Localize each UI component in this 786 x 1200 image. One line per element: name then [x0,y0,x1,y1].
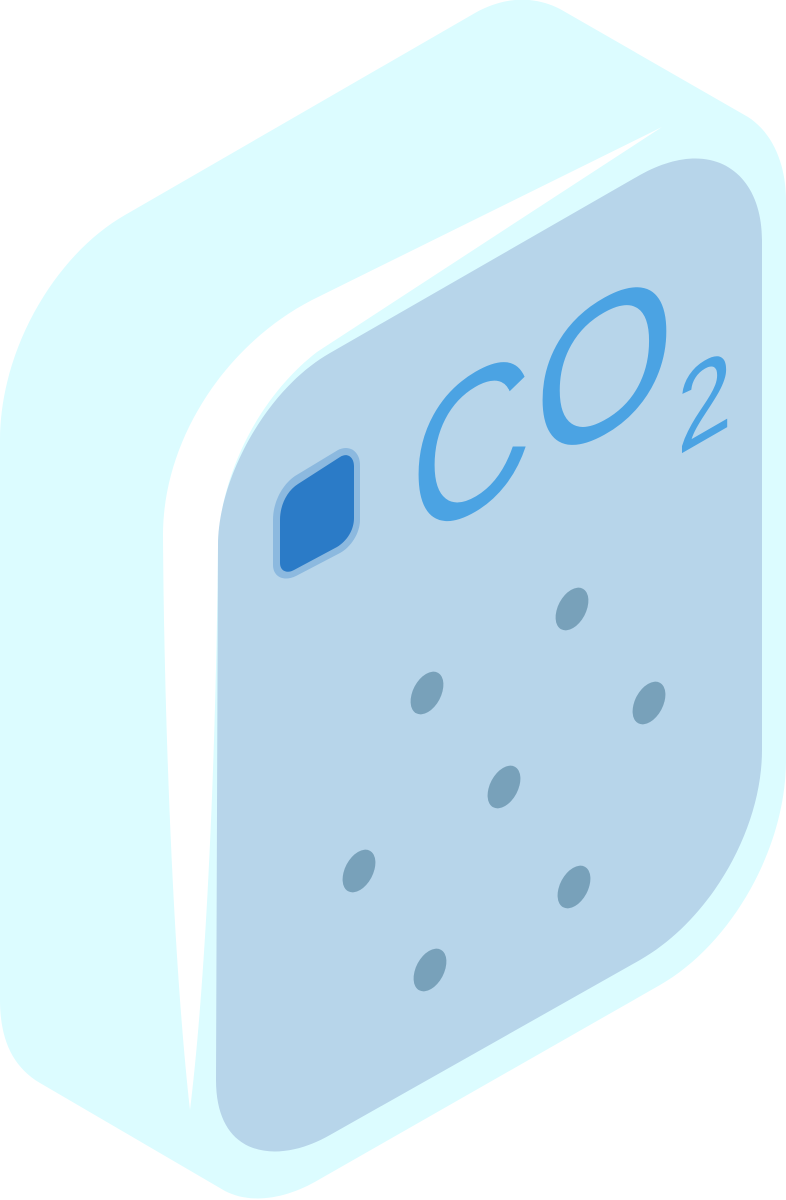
hole 3 [626,676,672,730]
hole 7 [407,943,453,997]
hole 1 [549,582,595,636]
indicator light outer ring [273,448,360,579]
hole 4 [481,760,527,814]
hole 6 [551,860,597,914]
sensor holes [336,582,672,997]
letter O: O [534,218,675,514]
hole 2 [404,666,450,720]
letter C: C [410,298,532,590]
front panel [216,158,762,1151]
hole 5 [336,844,382,898]
indicator light [273,448,360,579]
white highlight sliver [163,127,662,1110]
label: CO2 [410,218,732,590]
subscript 2: 2 [677,322,732,481]
indicator light inner square [280,455,354,572]
